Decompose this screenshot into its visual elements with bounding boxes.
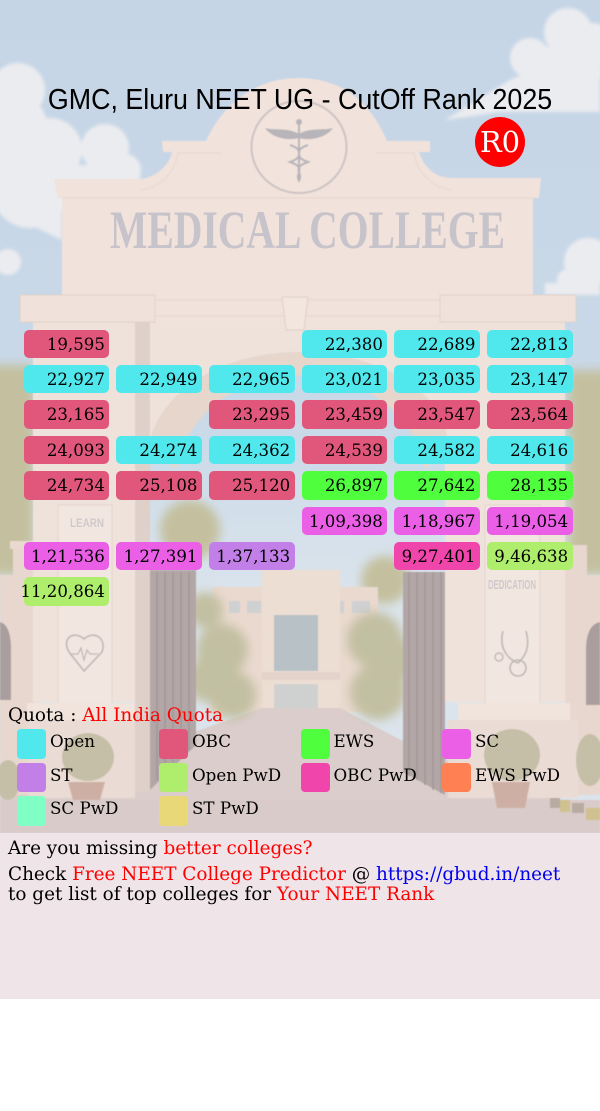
rank 24,362: 24,362: [232, 441, 290, 460]
rank 22,927: 22,927: [47, 370, 105, 389]
rank 1,09,398: 1,09,398: [309, 512, 383, 530]
rank 22,813: [487, 330, 573, 358]
left pillar: [33, 322, 150, 702]
legend: EWS PwD: [442, 763, 560, 792]
arch: [150, 322, 448, 440]
rank 28,135: 28,135: [510, 476, 568, 495]
legend: OBC: OBC: [192, 731, 231, 751]
heart panel icon: [67, 635, 103, 671]
title: GMC, Eluru NEET UG - CutOff Rank 2025: [48, 84, 552, 116]
legend: SC PwD: SC PwD: [50, 798, 118, 818]
right pillar: [445, 322, 565, 702]
rank 23,147: [487, 365, 573, 393]
rank 23,564: 23,564: [510, 405, 568, 424]
rank 27,642: 27,642: [417, 476, 475, 495]
rank 24,093: [24, 436, 109, 464]
rank 23,021: [302, 365, 387, 393]
rank 24,539: [302, 436, 387, 464]
background illustration: medical college gate: LEARN: [70, 516, 104, 530]
legend: Open: [17, 729, 95, 759]
legend: ST: ST: [50, 764, 73, 784]
round badge R0: [475, 117, 525, 167]
rank 26,897: [302, 471, 387, 500]
legend: OBC: [159, 729, 231, 759]
legend: ST: [17, 763, 73, 792]
rank 26,897: 26,897: [325, 476, 383, 495]
rank 1,09,398: [302, 506, 387, 535]
rank 25,108: 25,108: [139, 476, 197, 495]
ground: [0, 708, 600, 833]
rank 23,459: [302, 400, 387, 429]
legend: Open: Open: [50, 731, 95, 751]
promo line 3: to get list of top colleges for Your NEET Rank: [8, 884, 434, 905]
rank 27,642: [394, 471, 480, 500]
rank 1,18,967: 1,18,967: [402, 512, 475, 530]
rank 22,689: 22,689: [417, 334, 475, 354]
rank 24,582: [394, 436, 480, 464]
emblem ring: [252, 101, 346, 193]
rank 9,46,638: 9,46,638: [494, 547, 568, 566]
avenue trees: [186, 592, 417, 720]
rank 19,595: [24, 330, 109, 358]
rank 11,20,864: 11,20,864: [20, 582, 105, 601]
rank 24,093: 24,093: [47, 441, 105, 460]
rank 23,295: 23,295: [232, 405, 290, 424]
legend: SC: [442, 729, 499, 759]
rank 23,035: 23,035: [417, 370, 475, 389]
rank 1,21,536: [24, 542, 109, 570]
rank 22,927: [24, 365, 109, 393]
rank 23,021: 23,021: [325, 370, 383, 389]
background illustration: medical college gate: DEDICATION: [488, 577, 536, 592]
rank 23,547: 23,547: [417, 405, 475, 424]
background illustration: medical college gate: [0, 0, 600, 833]
rank 24,734: [24, 471, 109, 500]
legend: [17, 729, 560, 826]
rank 23,147: 23,147: [510, 370, 568, 389]
legend: SC: SC: [475, 731, 499, 751]
legend: OBC PwD: [301, 763, 417, 792]
rank 1,19,054: 1,19,054: [494, 512, 568, 530]
cutoff rank grid: [20, 330, 573, 606]
distant building: [212, 587, 264, 712]
rank 23,564: [487, 400, 573, 429]
legend: Open PwD: [159, 763, 281, 792]
rank 23,547: [394, 400, 480, 429]
rank 1,27,391: [116, 542, 202, 570]
rank 24,274: 24,274: [139, 441, 197, 460]
legend: SC PwD: [17, 796, 118, 826]
rank 22,689: [394, 330, 480, 358]
rank 22,965: [209, 365, 295, 393]
left wall with arched window: [13, 545, 36, 795]
rank 22,949: 22,949: [139, 370, 197, 389]
promo line 2: Check Free NEET College Predictor @ https://gbud.in/neet: [8, 864, 560, 884]
rank 1,37,133: [209, 542, 295, 570]
stethoscope panel icon: [502, 631, 528, 663]
rank 22,965: 22,965: [232, 370, 290, 389]
planters: [68, 782, 530, 808]
legend: EWS: EWS: [334, 731, 374, 751]
rank 28,135: [487, 471, 573, 500]
rank 9,46,638: [487, 542, 573, 570]
rank 9,27,401: 9,27,401: [402, 547, 475, 566]
rank 1,19,054: [487, 506, 573, 535]
right wall with arched window: [565, 545, 587, 795]
legend: Open PwD: Open PwD: [192, 764, 281, 784]
rank 25,120: 25,120: [232, 476, 290, 495]
promo panel: [0, 833, 600, 999]
legend: EWS: [301, 729, 374, 759]
rank 19,595: 19,595: [47, 334, 105, 354]
rank 1,27,391: 1,27,391: [124, 547, 197, 566]
rank 23,459: 23,459: [325, 405, 383, 424]
legend: ST PwD: ST PwD: [192, 798, 259, 818]
rank 25,120: [209, 471, 295, 500]
rank 25,108: [116, 471, 202, 500]
gates: [150, 570, 196, 790]
rank 24,362: [209, 436, 295, 464]
rank 11,20,864: [24, 577, 109, 606]
legend: OBC PwD: OBC PwD: [334, 764, 417, 784]
upper panel and pediment: [54, 78, 541, 322]
rank 22,380: 22,380: [325, 334, 383, 354]
promo line 1: Are you missing better colleges?: [8, 838, 312, 859]
rank 24,616: [487, 436, 573, 464]
rank 22,813: 22,813: [510, 334, 568, 354]
rank 1,37,133: 1,37,133: [216, 547, 290, 566]
rank 1,18,967: [394, 506, 480, 535]
rank 23,165: [24, 400, 109, 429]
side and rear trees: [0, 365, 600, 604]
rank 22,380: [302, 330, 387, 358]
rank 24,539: 24,539: [325, 441, 383, 460]
quota heading: Quota : All India Quota: [8, 705, 223, 726]
rank 22,949: [116, 365, 202, 393]
legend: EWS PwD: EWS PwD: [475, 764, 560, 784]
rank 23,035: [394, 365, 480, 393]
rank 23,295: [209, 400, 295, 429]
round badge R0: R0: [480, 125, 520, 159]
rank 24,582: 24,582: [417, 441, 475, 460]
rank 24,734: 24,734: [47, 476, 105, 495]
legend: ST PwD: [159, 796, 259, 826]
rank 23,165: 23,165: [47, 405, 105, 424]
rank 9,27,401: [394, 542, 480, 570]
rank 24,616: 24,616: [510, 441, 568, 460]
rank 1,21,536: 1,21,536: [31, 547, 105, 566]
rank 24,274: [116, 436, 202, 464]
